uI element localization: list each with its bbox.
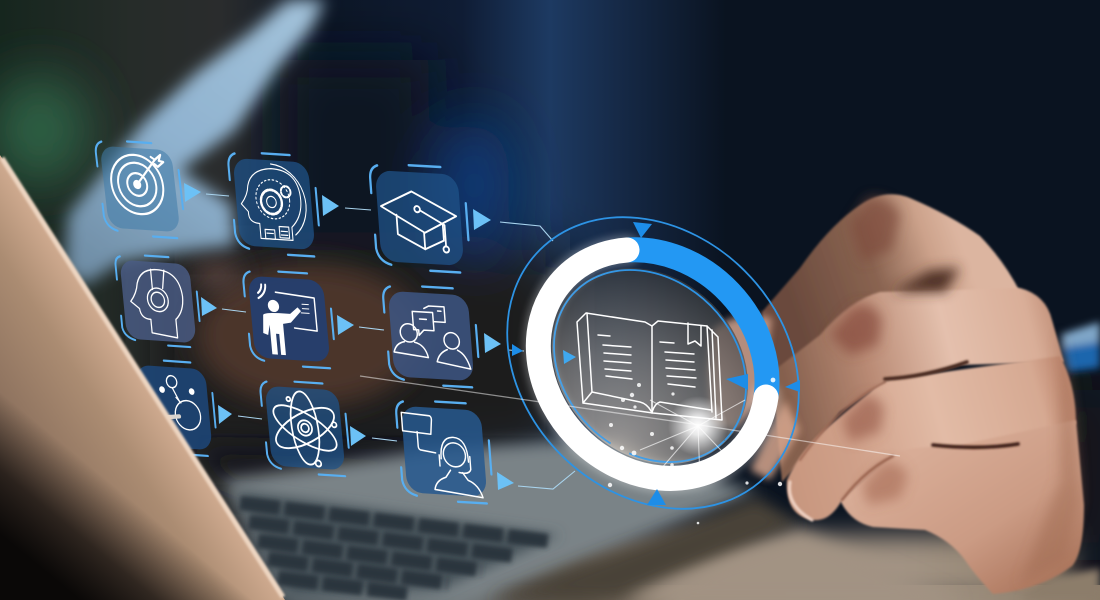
ring finger	[787, 356, 1076, 520]
arrow	[184, 183, 201, 202]
connector	[345, 208, 371, 210]
tile: atom	[259, 379, 351, 477]
tile: teacher at board	[242, 269, 337, 369]
arrow	[218, 405, 232, 424]
icon: support agent	[401, 412, 483, 498]
ring glow	[538, 250, 766, 478]
connector	[508, 350, 524, 351]
table	[625, 530, 960, 600]
blue progress arc	[627, 250, 767, 397]
sleeve	[1062, 322, 1100, 372]
icon: open book	[577, 313, 722, 420]
arrow	[337, 315, 354, 335]
arrow	[350, 426, 366, 446]
icon: molecule	[158, 375, 202, 431]
icon: head with headphones	[128, 268, 187, 338]
icon: people with speech bubbles	[390, 304, 471, 369]
fingertip seen through the ring	[708, 316, 800, 480]
tile: molecule	[135, 359, 218, 457]
tile: head with gears	[227, 151, 322, 257]
inner thin ring	[515, 231, 785, 501]
icon: head with gears	[238, 162, 309, 241]
ring markers	[512, 222, 800, 505]
tile: head with headphones	[114, 253, 202, 348]
light beam	[360, 376, 900, 456]
outer thin ring	[448, 158, 858, 568]
tile: support agent	[395, 399, 494, 504]
icon: graduation cap	[380, 190, 459, 253]
connector to ring	[500, 222, 553, 241]
tile: two people talking	[382, 284, 481, 388]
bottom strip	[0, 585, 1100, 600]
laptop keyboard	[236, 490, 560, 598]
hand holding ring	[708, 194, 1084, 594]
connector	[372, 438, 397, 441]
connector	[238, 416, 262, 419]
right table corner	[1020, 568, 1100, 600]
ring interior	[512, 228, 788, 504]
brown blurred hand behind the tiles	[195, 263, 425, 407]
white progress arc	[538, 250, 766, 478]
arrow	[322, 195, 339, 216]
icon: teacher at board	[257, 284, 320, 357]
index finger	[762, 194, 1020, 385]
connector to ring	[518, 471, 575, 489]
connector	[359, 327, 384, 330]
laptop lid	[0, 155, 285, 600]
dark area above keyboard	[190, 262, 420, 490]
arrow	[201, 297, 217, 316]
sparkle burst	[608, 378, 782, 524]
panel: glass tile grid	[94, 139, 575, 504]
connector	[206, 194, 229, 196]
finger creases	[789, 362, 1018, 520]
arrow	[484, 333, 501, 353]
light streak	[65, 0, 325, 285]
tile: graduation cap	[369, 163, 471, 273]
laptop deck	[222, 438, 757, 600]
arrow	[473, 209, 491, 230]
icon: target with arrow	[108, 151, 170, 216]
connector	[222, 309, 246, 312]
panel: progress ring	[360, 158, 900, 568]
table shadow	[490, 497, 800, 600]
little finger and palm	[840, 420, 1084, 594]
knuckle shading	[830, 198, 1080, 585]
tile: target	[94, 139, 186, 239]
icon: atom	[266, 388, 344, 468]
arrow	[497, 472, 514, 490]
middle finger	[772, 288, 1064, 482]
